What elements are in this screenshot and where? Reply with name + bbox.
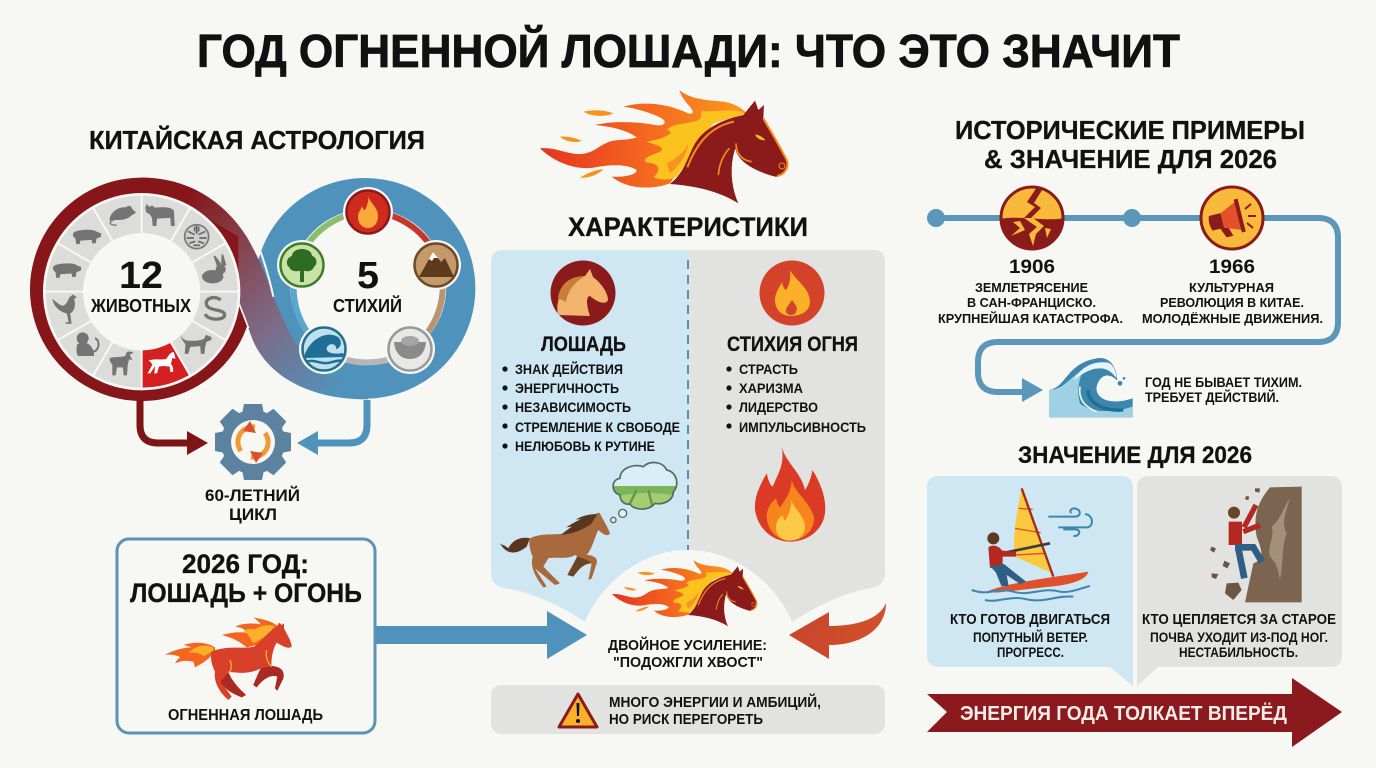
- animal: rooster: [52, 294, 77, 324]
- caption: fire horse: ОГНЕННАЯ ЛОШАДЬ: [168, 707, 323, 724]
- count: 5 elements: [333, 255, 402, 316]
- icon: warning triangle: [559, 694, 597, 727]
- text: clinging to the old: НЕСТАБИЛЬНОСТЬ.: [1179, 645, 1298, 660]
- panel: horse: [491, 250, 688, 622]
- list: horse traits: НЕЛЮБОВЬ К РУТИНЕ: [515, 438, 655, 454]
- panel: ready to move: [927, 476, 1133, 686]
- count: 5 elements: 5: [357, 255, 379, 297]
- icon: earthquake: [1001, 187, 1063, 250]
- list: horse traits: СТРЕМЛЕНИЕ К СВОБОДЕ: [515, 419, 680, 435]
- label: 60-year cycle: 60-ЛЕТНИЙ: [205, 486, 300, 505]
- text: ready to move: КТО ГОТОВ ДВИГАТЬСЯ: [950, 611, 1110, 628]
- list: fire traits: ИМПУЛЬСИВНОСТЬ: [739, 419, 866, 435]
- count: 5 elements: СТИХИЙ: [333, 295, 402, 316]
- list: horse traits: НЕЗАВИСИМОСТЬ: [515, 399, 631, 415]
- heading: fire element: СТИХИЯ ОГНЯ: [727, 333, 858, 356]
- arrow: animals into cycle: [140, 400, 208, 455]
- arrow: 2026 box into centre: [376, 611, 587, 659]
- icon: gear with cycle arrows: [215, 404, 291, 480]
- event: 1966: [1142, 257, 1323, 326]
- icon: flame in circle: [760, 260, 824, 326]
- illustration: small flaming horse head: [612, 560, 757, 626]
- text: clinging to the old: ПОЧВА УХОДИТ ИЗ-ПОД НОГ.: [1150, 630, 1328, 645]
- list: horse traits: ЗНАК ДЕЙСТВИЯ: [515, 360, 623, 377]
- illustration: flaming horse head: [540, 90, 788, 203]
- count: 12 animals: ЖИВОТНЫХ: [90, 295, 192, 316]
- animal: ox: [145, 204, 175, 226]
- title: ГОД ОГНЕННОЙ ЛОШАДИ: ЧТО ЭТО ЗНАЧИТ: [197, 25, 1180, 77]
- animal: snake: [205, 298, 225, 319]
- event: 1906: В САН-ФРАНЦИСКО.: [967, 295, 1096, 310]
- divider dashes: [687, 260, 689, 550]
- callout: double amplification dome: [585, 550, 792, 680]
- warning text: МНОГО ЭНЕРГИИ И АМБИЦИЙ,: [609, 693, 821, 711]
- list: horse traits: ЭНЕРГИЧНОСТЬ: [515, 380, 619, 396]
- list: fire traits: [726, 361, 866, 435]
- animal: boar: [73, 230, 101, 244]
- text: ready to move: [950, 611, 1110, 660]
- text: the year is not quiet: ГОД НЕ БЫВАЕТ ТИХИМ.: [1145, 375, 1302, 390]
- icon: windsurfer: [972, 488, 1092, 601]
- icon: megaphone: [1201, 187, 1263, 249]
- event: 1906: ЗЕМЛЕТРЯСЕНИЕ: [975, 280, 1088, 295]
- box heading: [130, 549, 362, 608]
- box heading: 2026 ГОД:: [182, 549, 309, 579]
- arrow: elements into cycle: [297, 400, 367, 455]
- event: 1966: РЕВОЛЮЦИЯ В КИТАЕ.: [1160, 295, 1304, 310]
- animal: monkey: [76, 332, 99, 356]
- icon: metal element: [385, 324, 435, 374]
- label: 60-year cycle: ЦИКЛ: [229, 505, 277, 524]
- list: fire traits: ХАРИЗМА: [739, 380, 803, 396]
- animal: pig: [53, 263, 81, 278]
- text: ready to move: ПОПУТНЫЙ ВЕТЕР.: [973, 630, 1088, 645]
- icon: climber on crumbling cliff: [1210, 487, 1302, 602]
- icon: big wave: [1049, 358, 1133, 417]
- box heading: ЛОШАДЬ + ОГОНЬ: [130, 578, 362, 608]
- timeline path with arrow: [927, 209, 1338, 402]
- event: 1966: МОЛОДЁЖНЫЕ ДВИЖЕНИЯ.: [1142, 311, 1323, 326]
- arrow banner: energy pushes forward: [927, 678, 1342, 747]
- icon: water element: [299, 324, 349, 374]
- event: 1906: КРУПНЕЙШАЯ КАТАСТРОФА.: [938, 311, 1123, 326]
- text: clinging to the old: [1142, 611, 1336, 660]
- text: double amplification: [608, 636, 767, 671]
- heading: meaning for 2026: ЗНАЧЕНИЕ ДЛЯ 2026: [1018, 442, 1252, 469]
- icon: horse in circle: [550, 260, 616, 326]
- infinity diagram: 12 animals and 5 elements: [30, 178, 475, 401]
- event: 1906: 1906: [1009, 257, 1055, 278]
- heading: historical examples: & ЗНАЧЕНИЕ ДЛЯ 2026: [984, 146, 1277, 174]
- count: 12 animals: 12: [119, 255, 163, 297]
- animal: rat: [109, 206, 136, 225]
- arrow banner: energy pushes forward: ЭНЕРГИЯ ГОДА ТОЛКАЕТ ВПЕРЁД: [960, 702, 1287, 725]
- count: 12 animals: [90, 255, 192, 316]
- panel: warning: [491, 685, 885, 734]
- heading: horse: ЛОШАДЬ: [541, 333, 626, 356]
- event: 1966: 1966: [1209, 257, 1255, 278]
- heading: historical examples: [955, 117, 1305, 174]
- list: fire traits: СТРАСТЬ: [739, 361, 798, 377]
- icon: fire horse: [165, 617, 292, 700]
- text: the year is not quiet: [1145, 375, 1302, 405]
- icon: wood element: [277, 240, 327, 290]
- heading: characteristics: ХАРАКТЕРИСТИКИ: [568, 212, 808, 242]
- animal: tiger: [185, 225, 209, 249]
- label: 60-year cycle: [205, 486, 300, 524]
- event: 1966: КУЛЬТУРНАЯ: [1189, 280, 1274, 295]
- icon: earth element: [411, 240, 461, 290]
- text: ready to move: ПРОГРЕСС.: [997, 645, 1064, 660]
- warning text: НО РИСК ПЕРЕГОРЕТЬ: [609, 711, 763, 728]
- animal: horse highlighted in red: [148, 352, 176, 373]
- heading: historical examples: ИСТОРИЧЕСКИЕ ПРИМЕРЫ: [955, 117, 1305, 145]
- heading: Chinese astrology: КИТАЙСКАЯ АСТРОЛОГИЯ: [89, 125, 425, 155]
- event: 1906: [938, 257, 1123, 326]
- warning text: [609, 693, 821, 728]
- text: the year is not quiet: ТРЕБУЕТ ДЕЙСТВИЙ.: [1145, 390, 1279, 405]
- animal: dog: [181, 335, 211, 354]
- animal: goat: [110, 352, 134, 375]
- panel: 2026 year box: [117, 539, 375, 733]
- text: double amplification: ДВОЙНОЕ УСИЛЕНИЕ:: [608, 636, 767, 654]
- list: horse traits: [502, 360, 680, 454]
- animal: rabbit: [202, 255, 226, 283]
- icon: fire element: [343, 187, 393, 237]
- element ring arcs: [294, 212, 443, 363]
- illustration: running horse dreaming of a field: [500, 460, 683, 587]
- arrow: fire into centre: [789, 603, 886, 659]
- illustration: large flame: [755, 447, 825, 542]
- list: fire traits: ЛИДЕРСТВО: [739, 399, 818, 415]
- text: clinging to the old: КТО ЦЕПЛЯЕТСЯ ЗА СТАРОЕ: [1142, 611, 1336, 628]
- zodiac wheel: [43, 193, 240, 390]
- blue element disc and ribbon: [30, 178, 475, 401]
- text: double amplification: "ПОДОЖГЛИ ХВОСТ": [613, 654, 763, 671]
- panel: clinging to the old: [1137, 476, 1342, 686]
- panel: fire element: [688, 250, 885, 622]
